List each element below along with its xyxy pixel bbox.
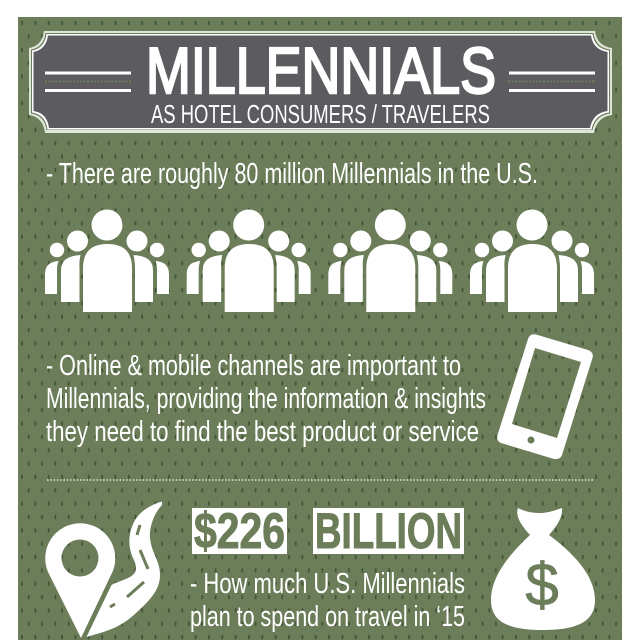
- text: travel spend: plan to spend on travel in ‘15: [190, 601, 465, 633]
- banner rules: right: [508, 72, 596, 92]
- title: MILLENNIALS: [146, 34, 496, 107]
- icon: money bag: $: [525, 551, 559, 618]
- text: online and mobile channels: they need to find the best product or service: [46, 416, 479, 448]
- text: online and mobile channels: - Online & mobile channels are important to: [46, 350, 461, 382]
- icon: map pin: [45, 523, 115, 638]
- icon: people group 1: [45, 210, 169, 312]
- text: online and mobile channels: [46, 350, 486, 448]
- banner rules: left: [45, 72, 132, 92]
- stat box: billion: BILLION: [315, 503, 462, 559]
- stat box: $226: $226: [194, 503, 285, 559]
- text: online and mobile channels: Millennials, providing the information & insights: [46, 383, 486, 415]
- icon: people group 3: [328, 210, 452, 312]
- stat: $226 billion: [192, 503, 464, 559]
- text: travel spend: [190, 568, 465, 633]
- icon: map pin and road: [45, 502, 162, 638]
- icon: road: [86, 502, 162, 637]
- text: travel spend: - How much U.S. Millennials: [190, 568, 465, 600]
- icon row: four groups of people: [45, 210, 594, 312]
- subtitle: AS HOTEL CONSUMERS / TRAVELERS: [151, 99, 490, 129]
- icon: people group 2: [187, 210, 311, 312]
- banner: title plaque: [29, 31, 612, 133]
- divider: [47, 479, 594, 481]
- icon: money bag: [491, 508, 595, 630]
- icon: people group 4: [470, 210, 594, 312]
- icon: smartphone: [497, 334, 593, 459]
